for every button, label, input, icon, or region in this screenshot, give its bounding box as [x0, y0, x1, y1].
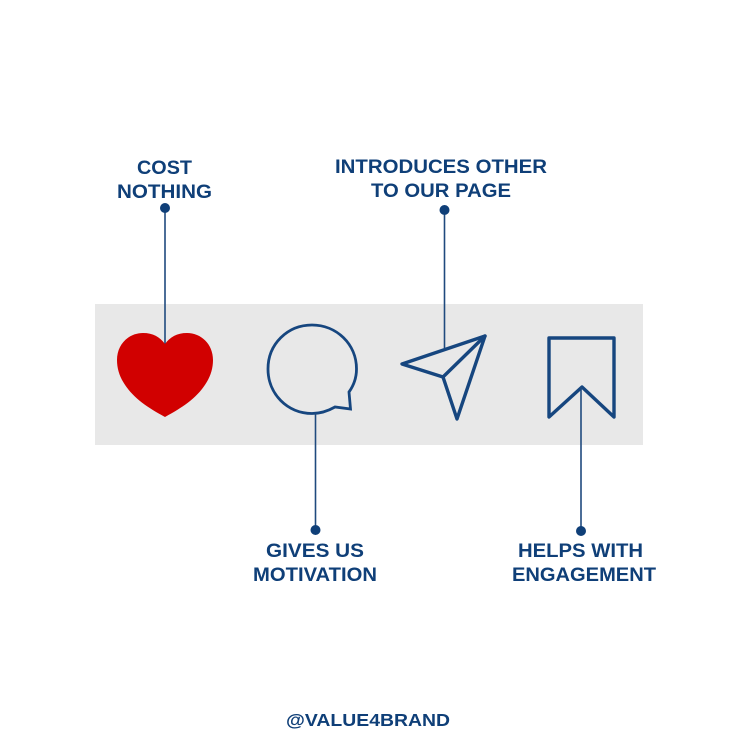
icon: red heart: [117, 333, 213, 417]
footer handle: @VALUE4BRAND: [286, 710, 450, 730]
connector: cost nothing: [160, 203, 170, 345]
label: gives us motivation: MOTIVATION: [253, 564, 377, 586]
label: helps with engagement: ENGAGEMENT: [512, 564, 656, 586]
connector: introduces other: [440, 205, 450, 348]
icon: paper plane: [402, 336, 485, 419]
label: gives us motivation: [253, 540, 377, 586]
icon: comment bubble: [268, 325, 356, 414]
label: cost nothing: NOTHING: [117, 181, 212, 203]
connector: helps with engagement: [576, 387, 586, 536]
label: helps with engagement: HELPS WITH: [518, 540, 643, 562]
label: cost nothing: COST: [137, 157, 192, 179]
label: introduces other to our page: [335, 156, 547, 202]
panel: grey action bar: [95, 304, 643, 445]
label: cost nothing: [117, 157, 212, 203]
label: gives us motivation: GIVES US: [266, 540, 364, 562]
label: introduces other to our page: TO OUR PAGE: [371, 180, 511, 202]
label: introduces other to our page: INTRODUCES OTHER: [335, 156, 547, 178]
connector: gives us motivation: [310, 413, 320, 535]
icon: bookmark: [549, 338, 614, 417]
label: helps with engagement: [512, 540, 656, 586]
